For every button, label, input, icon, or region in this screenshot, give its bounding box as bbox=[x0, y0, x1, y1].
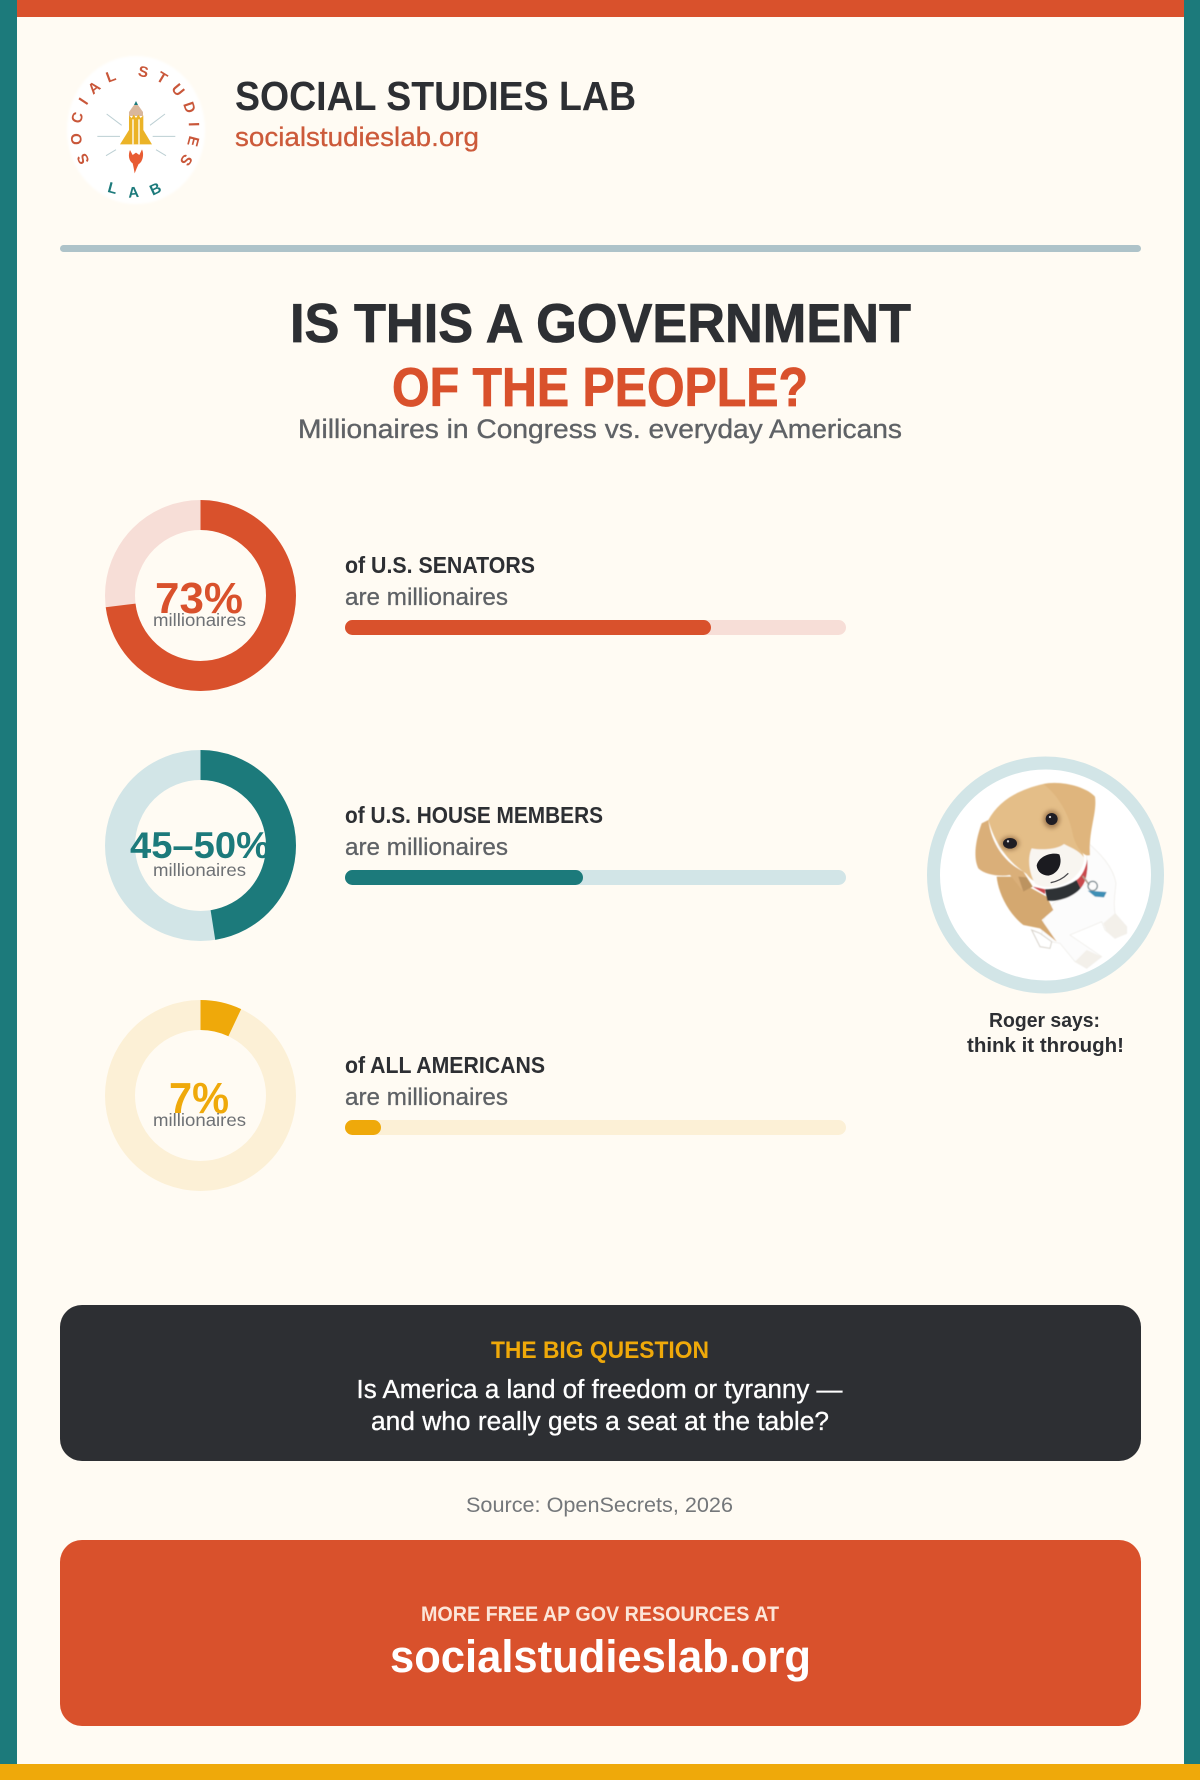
icon: pencil rocket bbox=[97, 101, 175, 173]
text: brand URL: socialstudieslab.org bbox=[235, 122, 479, 152]
donut chart: 45–50%: 45–50% bbox=[130, 825, 270, 866]
title: IS THIS A GOVERNMENT bbox=[290, 292, 911, 354]
donut chart: 73%: millionaires bbox=[153, 610, 246, 630]
donut chart: 7%: millionaires bbox=[153, 1110, 246, 1130]
source note: Source: OpenSecrets, 2026 bbox=[466, 1493, 733, 1517]
icon: Social Studies Lab logo: SOCIAL STUDIES bbox=[70, 66, 200, 166]
caption: Roger says bbox=[967, 1009, 1124, 1057]
panel: call to action bbox=[60, 1540, 1141, 1726]
label: house members: of U.S. HOUSE MEMBERS bbox=[345, 802, 603, 828]
eyes bbox=[1003, 838, 1017, 849]
row: U.S. House members bbox=[120, 765, 846, 926]
donut chart: 45–50% bbox=[120, 765, 281, 926]
label: all Americans bbox=[345, 1052, 545, 1111]
title bbox=[290, 292, 911, 418]
frame: right teal border bbox=[1184, 0, 1200, 1780]
label: all Americans: of ALL AMERICANS bbox=[345, 1052, 545, 1078]
icon: Social Studies Lab logo: LAB bbox=[108, 182, 161, 198]
progress bar: 47.5% bbox=[345, 870, 846, 885]
donut chart: 73%: 73% bbox=[155, 574, 243, 623]
subtitle: Millionaires in Congress vs. everyday Americans bbox=[298, 414, 902, 444]
label: house members bbox=[345, 802, 603, 861]
label: senators: of U.S. SENATORS bbox=[345, 552, 535, 578]
text: resources line: MORE FREE AP GOV RESOURCES AT bbox=[421, 1602, 779, 1626]
progress bar: 73% bbox=[345, 620, 846, 635]
label: all Americans: are millionaires bbox=[345, 1084, 508, 1111]
progress bar: 7% bbox=[345, 1120, 846, 1135]
row: U.S. senators bbox=[120, 515, 846, 676]
frame: top orange bar bbox=[17, 0, 1184, 17]
frame: bottom yellow bar bbox=[0, 1764, 1200, 1780]
text: question line 1 and 2: and who really gets a seat at the table? bbox=[371, 1408, 829, 1436]
frame: left teal border bbox=[0, 0, 17, 1780]
text: website: socialstudieslab.org bbox=[390, 1631, 811, 1682]
mascot: Roger the dog in circle bbox=[934, 763, 1158, 987]
donut chart: 73% bbox=[120, 515, 281, 676]
caption: Roger says: think it through! bbox=[967, 1034, 1124, 1057]
panel: the big question bbox=[60, 1305, 1141, 1461]
title accent line: OF THE PEOPLE? bbox=[392, 356, 808, 418]
eye shading bbox=[1001, 810, 1060, 850]
donut chart: 7%: 7% bbox=[169, 1074, 229, 1123]
row: all Americans bbox=[120, 1015, 846, 1176]
donut chart: 7% bbox=[120, 1015, 281, 1176]
text: question line 1 and 2: Is America a land of freedom or tyranny — bbox=[356, 1376, 843, 1404]
heading: brand name: SOCIAL STUDIES LAB bbox=[235, 73, 636, 119]
label: senators: are millionaires bbox=[345, 584, 508, 611]
icon: dog illustration bbox=[975, 783, 1127, 968]
text: question line 1 and 2 bbox=[356, 1376, 843, 1436]
donut chart: 45–50%: millionaires bbox=[153, 860, 246, 880]
nose bbox=[1037, 854, 1061, 876]
label: house members: are millionaires bbox=[345, 834, 508, 861]
heading: the big question: THE BIG QUESTION bbox=[491, 1337, 709, 1364]
label: senators bbox=[345, 552, 535, 611]
caption: Roger says: Roger says: bbox=[989, 1009, 1100, 1032]
